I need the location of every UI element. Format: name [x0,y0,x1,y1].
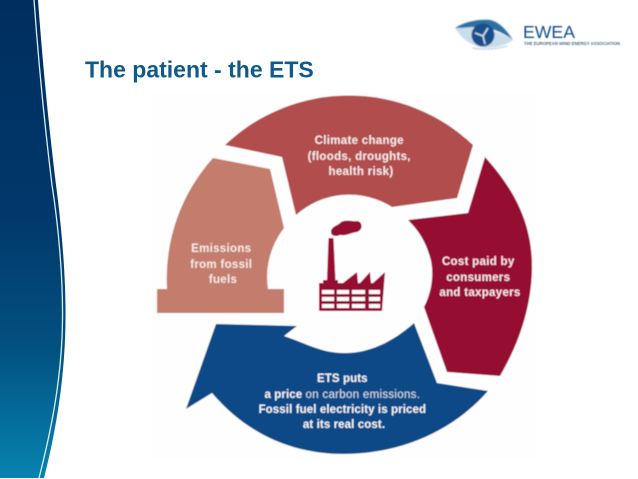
label: climate change: Climate change [315,135,404,147]
panel: cycle diagram [153,92,537,460]
label: cost paid: and taxpayers [439,287,521,299]
label: ETS text: a price on carbon emissions. [264,389,420,401]
icon: factory [319,221,385,311]
panel: ETS arrow [186,323,488,454]
panel: cost paid [408,157,532,376]
title: The patient - the ETS [85,56,314,82]
label: climate change: (floods, droughts, [308,151,411,163]
label: cost paid: Cost paid by [442,256,515,268]
label: cost paid: consumers [446,272,510,284]
label: ETS text: at its real cost. [303,419,385,431]
label: emissions: Emissions [191,243,251,255]
icon: eye with turbine [455,20,513,49]
label: ETS text: Fossil fuel electricity is priced [259,404,426,416]
logo wordmark: EWEA [523,22,575,42]
label: climate change: health risk) [329,166,393,178]
label: emissions: from fossil [190,259,252,271]
panel: climate change [225,95,473,215]
label: emissions: fuels [209,274,237,286]
panel: emissions from fossil fuels [157,158,284,313]
panel: left sidebar wave [0,0,66,478]
logo: EWEA [455,20,620,49]
label: ETS text: ETS puts [317,373,368,385]
logo tagline: THE EUROPEAN WIND ENERGY ASSOCIATION [524,41,620,47]
